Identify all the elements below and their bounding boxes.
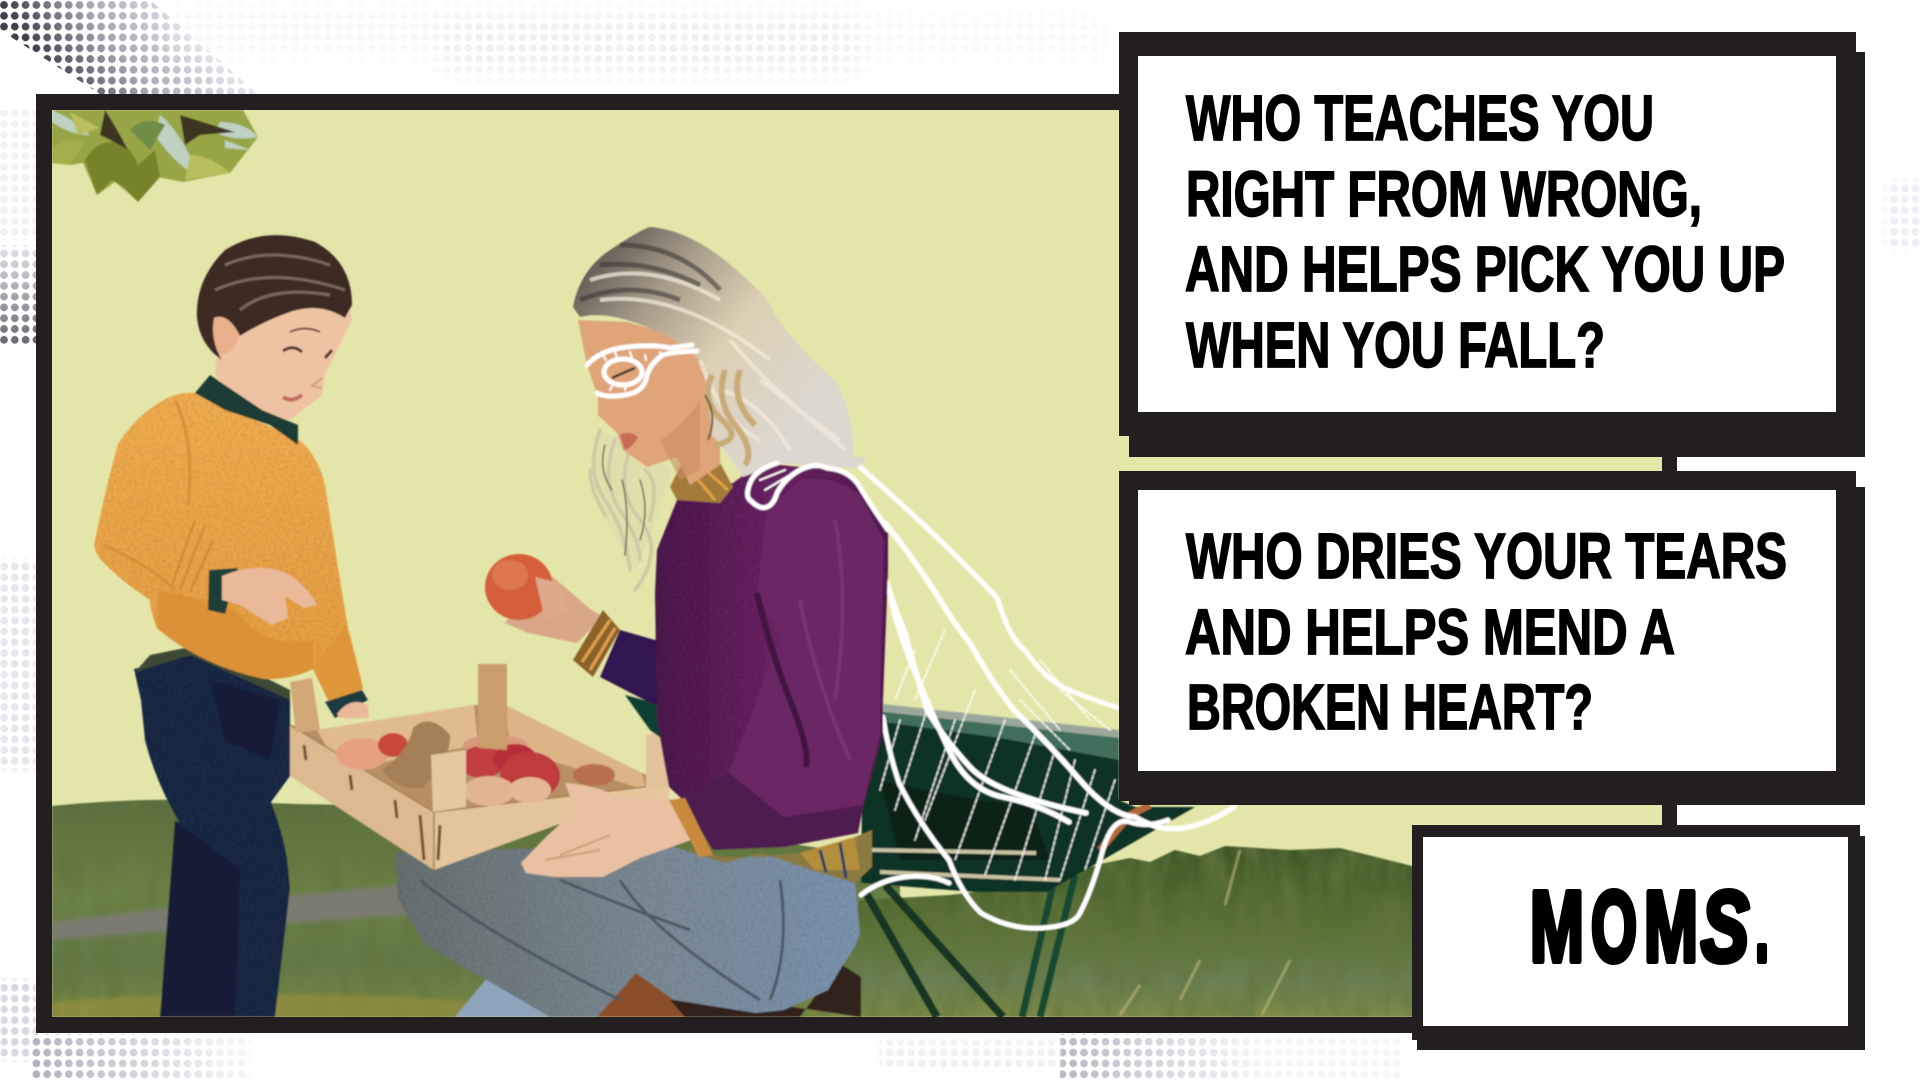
- callout: second question: BROKEN HEART?: [1187, 671, 1593, 743]
- callout: answer: .: [1755, 871, 1769, 983]
- callout: answer: [1412, 825, 1865, 1050]
- photo scene: [52, 110, 1420, 1017]
- callout: second question: AND HELPS MEND A: [1185, 596, 1675, 668]
- collar: [670, 457, 733, 503]
- crate posts: [290, 664, 669, 812]
- wheelbarrow: [861, 704, 1195, 1017]
- callout: answer: M: [1644, 871, 1698, 983]
- callout: second question: [1119, 471, 1865, 805]
- leaves: [52, 110, 258, 202]
- panel: photo frame: [36, 94, 1677, 1033]
- callout: first question: RIGHT FROM WRONG,: [1186, 158, 1702, 230]
- grass right: [820, 846, 1420, 1017]
- mom upper body: [485, 227, 888, 883]
- apron hint: [624, 694, 661, 738]
- closed eyelid: [612, 368, 635, 378]
- mom jeans: [395, 847, 861, 1017]
- crate: [290, 664, 669, 870]
- boy neck and face: [214, 307, 352, 422]
- mom neck and face: [578, 320, 720, 485]
- callout: answer: O: [1591, 871, 1637, 983]
- boy hand and cuff: [208, 568, 238, 614]
- sleeve: [599, 629, 658, 706]
- callout: answer: S: [1701, 871, 1749, 983]
- mask and shoulder sketch: [587, 345, 888, 530]
- wrist cuff: [669, 798, 713, 857]
- apple arm: [505, 577, 603, 643]
- boy sweater: [94, 393, 363, 704]
- sweater: [655, 463, 888, 850]
- callout: first question: [1119, 32, 1865, 457]
- mom hair: [573, 227, 867, 477]
- boy hair: [197, 235, 352, 360]
- patterned cuff: [573, 610, 620, 677]
- hand on crate: [521, 783, 691, 877]
- fruit: [336, 721, 615, 806]
- callout: first question: WHEN YOU FALL?: [1186, 309, 1605, 381]
- held apple: [485, 554, 553, 620]
- cape sketch lines: [860, 467, 1234, 928]
- shoulder loop: [748, 463, 888, 530]
- callout: answer: M: [1530, 871, 1584, 983]
- grass left: [52, 800, 900, 1017]
- eye mask: [587, 345, 697, 396]
- plaid shirt hem: [680, 830, 872, 883]
- callout: first question: WHO TEACHES YOU: [1186, 82, 1654, 154]
- boy: [94, 235, 369, 1017]
- boy jeans: [134, 654, 290, 1017]
- loose hair wisps: [588, 428, 657, 592]
